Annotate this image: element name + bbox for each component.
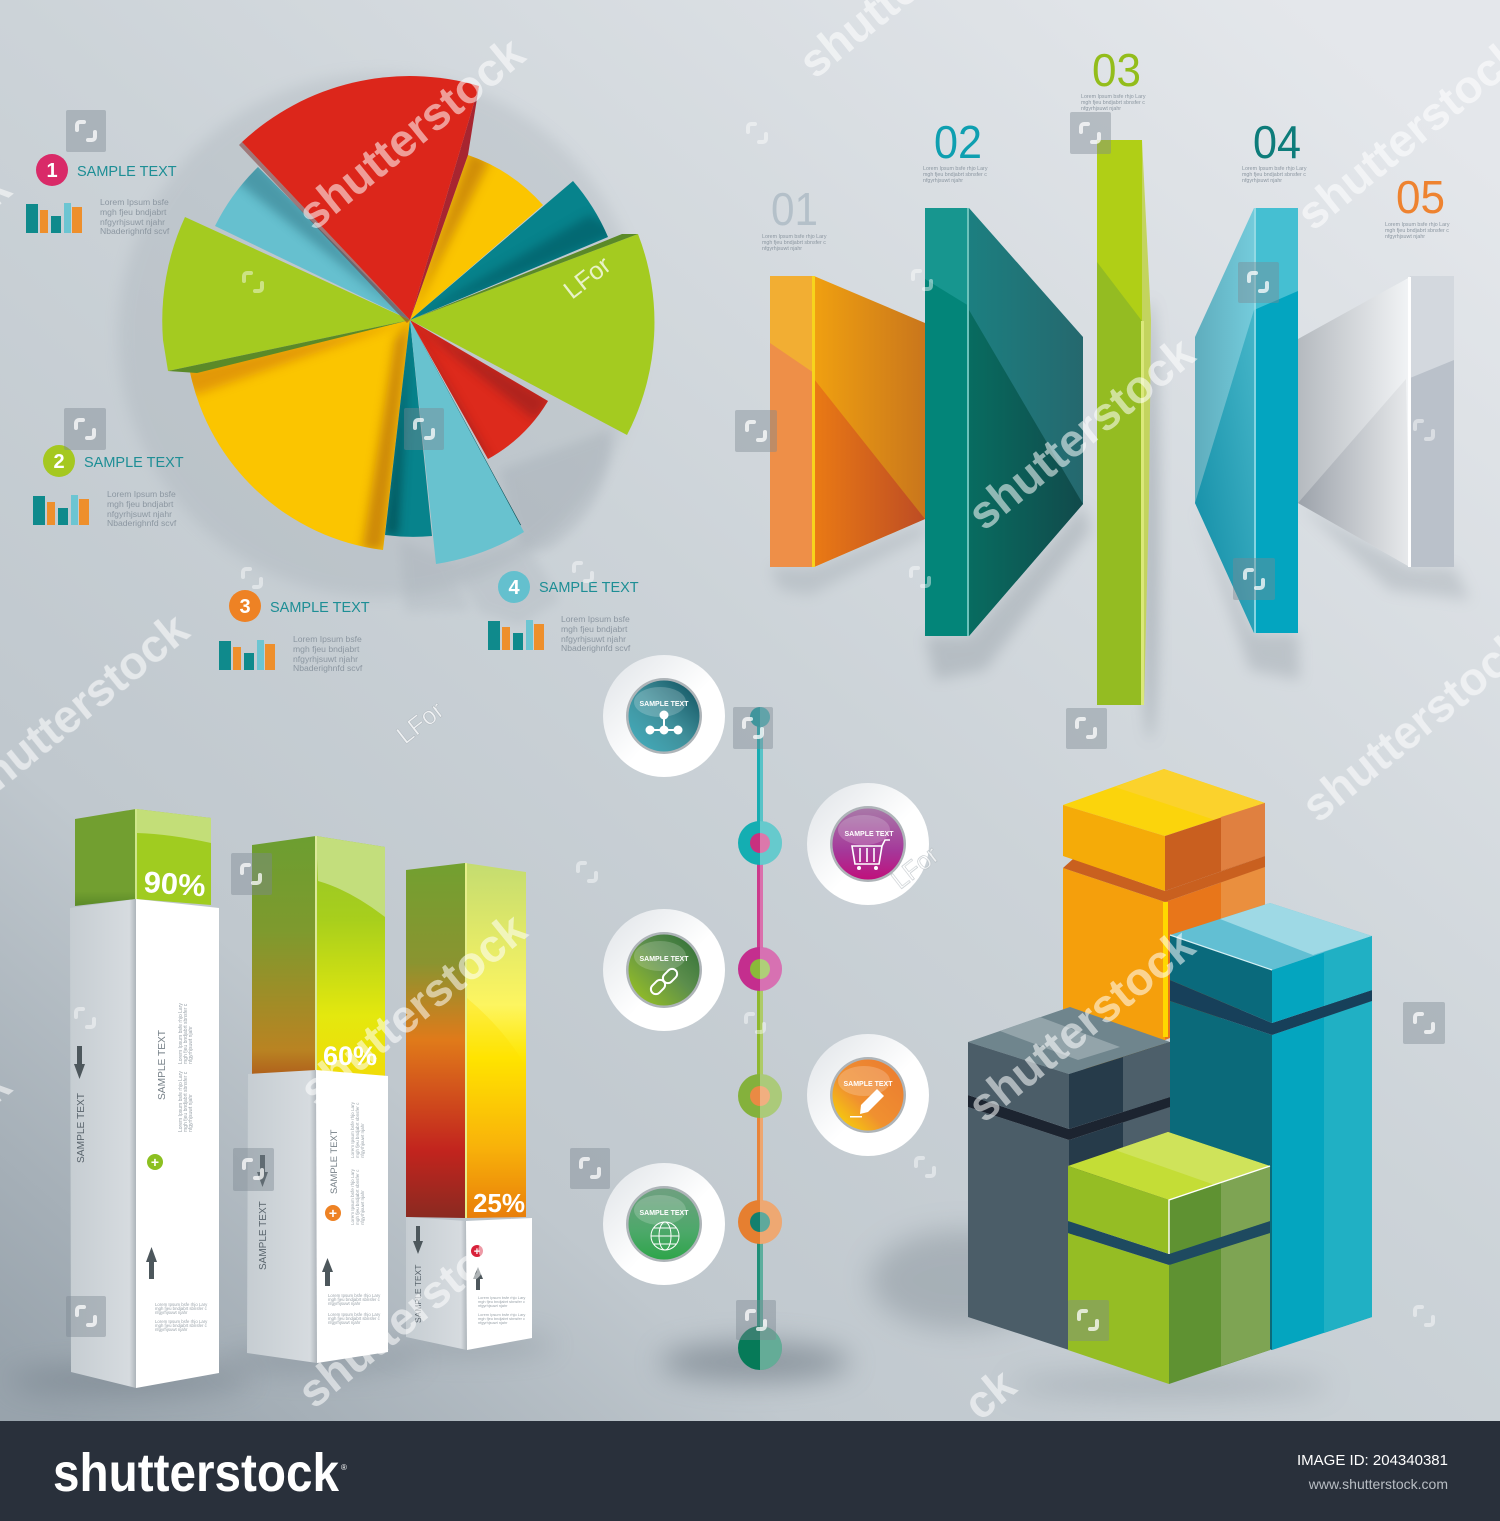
column 90%: nfgyrhjsuwt njahr	[155, 1327, 188, 1332]
grey block	[968, 1007, 1170, 1350]
watermark tiles	[64, 110, 1445, 1341]
column 60%: Lorem Ipsum bsfe rhjo Lary	[328, 1293, 381, 1298]
step 05 grey: nfgyrhjsuwt njahr	[1385, 234, 1425, 240]
legend 3: SAMPLE TEXT	[270, 600, 370, 616]
small LFor marks: LFor	[391, 696, 449, 750]
column 60%: SAMPLE TEXT	[328, 1129, 339, 1194]
small LFor marks: LFor	[886, 841, 944, 895]
step 04 blue: 04	[1253, 116, 1301, 168]
step 03 lime	[1081, 44, 1151, 705]
legend 2: Lorem Ipsum bsfe	[107, 489, 176, 499]
legend 1	[26, 154, 177, 236]
column 90%: Lorem Ipsum bsfe rhjo Lary	[155, 1302, 208, 1307]
node 4	[738, 1074, 782, 1118]
step 01 orange	[762, 183, 925, 567]
column 90%: Lorem Ipsum bsfe rhjo Lary	[178, 1003, 184, 1064]
column 90%: mgh fjeu bndjabrt sbnsfer c	[183, 1003, 189, 1064]
column 25%: 25%	[473, 1188, 525, 1218]
column 25%: Lorem Ipsum bsfe rhjo Lary	[478, 1295, 525, 1300]
small LFor marks	[391, 696, 944, 895]
footer registered mark: ®	[341, 1463, 347, 1472]
step 02 teal: Lorem Ipsum bsfe rhjo Lary	[923, 166, 988, 172]
funnel chart	[762, 44, 1470, 740]
timeline	[660, 707, 850, 1382]
column 90%: Lorem Ipsum bsfe rhjo Lary	[178, 1071, 184, 1132]
step 03 lime: Lorem Ipsum bsfe rhjo Lary	[1081, 94, 1146, 100]
column 25%: +	[474, 1246, 480, 1258]
legend 2: Nbaderighnfd scvf	[107, 518, 177, 528]
step 01 orange: Lorem Ipsum bsfe rhjo Lary	[762, 234, 827, 240]
column 25%: nfgyrhjsuwt njahr	[478, 1320, 508, 1325]
step 05 grey: mgh fjeu bndjabrt sbnsfer c	[1385, 228, 1449, 234]
footer image id: IMAGE ID: 204340381	[1297, 1452, 1448, 1469]
legend 1: 1	[46, 160, 58, 182]
watermark text: shutterstock	[288, 26, 534, 240]
step 02 teal: mgh fjeu bndjabrt sbnsfer c	[923, 172, 987, 178]
column 90%: nfgyrhjsuwt njahr	[188, 1094, 194, 1132]
node 1	[750, 707, 770, 727]
legend 4: Lorem Ipsum bsfe	[561, 614, 630, 624]
legend 4: SAMPLE TEXT	[539, 580, 639, 596]
percentage columns	[10, 809, 555, 1394]
column 60%: nfgyrhjsuwt njahr	[360, 1123, 365, 1158]
column 25%: nfgyrhjsuwt njahr	[478, 1303, 508, 1308]
step 04 blue: nfgyrhjsuwt njahr	[1242, 178, 1282, 184]
step 03 lime: 03	[1092, 44, 1141, 96]
pie chart	[118, 73, 654, 625]
column 90%: nfgyrhjsuwt njahr	[155, 1310, 188, 1315]
button: link	[603, 909, 725, 1031]
legend 4	[488, 571, 639, 653]
button: globe	[603, 1163, 725, 1285]
lime block	[1068, 1132, 1270, 1384]
legend 2: nfgyrhjsuwt njahr	[107, 509, 172, 519]
legend 2: SAMPLE TEXT	[84, 455, 184, 471]
button: globe: SAMPLE TEXT	[639, 1210, 689, 1217]
column 90%	[70, 809, 219, 1388]
column 90%: Lorem Ipsum bsfe rhjo Lary	[155, 1319, 208, 1324]
column 60%: nfgyrhjsuwt njahr	[360, 1190, 365, 1225]
column 60%: Lorem Ipsum bsfe rhjo Lary	[350, 1101, 355, 1158]
legend 3: nfgyrhjsuwt njahr	[293, 654, 358, 664]
column 60%: 60%	[323, 1041, 377, 1071]
legend 4: Nbaderighnfd scvf	[561, 643, 631, 653]
column 60%: mgh fjeu bndjabrt sbnsfer c	[328, 1297, 381, 1302]
button: network: SAMPLE TEXT	[639, 701, 689, 708]
legend 3: Nbaderighnfd scvf	[293, 663, 363, 673]
button: cart: SAMPLE TEXT	[844, 831, 894, 838]
column 25%: SAMPLE TEXT	[413, 1265, 423, 1323]
step 03 lime: mgh fjeu bndjabrt sbnsfer c	[1081, 100, 1145, 106]
node 5	[738, 1200, 782, 1244]
watermark text: shutterstock	[958, 326, 1204, 540]
column 90%: 90%	[143, 866, 207, 903]
legend 1: SAMPLE TEXT	[77, 164, 177, 180]
legend 1: Lorem Ipsum bsfe	[100, 197, 169, 207]
column 60%: mgh fjeu bndjabrt sbnsfer c	[355, 1102, 360, 1158]
button: pencil	[807, 1034, 929, 1156]
column 60%: Lorem Ipsum bsfe rhjo Lary	[350, 1168, 355, 1225]
footer url: www.shutterstock.com	[1308, 1476, 1448, 1492]
step 04 blue: Lorem Ipsum bsfe rhjo Lary	[1242, 166, 1307, 172]
legend 4: 4	[508, 577, 520, 599]
column 90%: nfgyrhjsuwt njahr	[188, 1026, 194, 1064]
legend 3: 3	[239, 596, 251, 618]
legend 4: nfgyrhjsuwt njahr	[561, 634, 626, 644]
column 60%: mgh fjeu bndjabrt sbnsfer c	[328, 1316, 381, 1321]
footer logo: shutterstock	[53, 1443, 340, 1503]
legend 1: mgh fjeu bndjabrt	[100, 207, 167, 217]
step 01 orange: 01	[771, 183, 818, 235]
blue block	[1170, 903, 1372, 1350]
column 60%: +	[329, 1205, 337, 1221]
button: network	[603, 655, 725, 777]
footer bar	[0, 1421, 1500, 1521]
column 90%: mgh fjeu bndjabrt sbnsfer c	[183, 1071, 189, 1132]
step 04 blue	[1195, 116, 1307, 633]
step 01 orange: nfgyrhjsuwt njahr	[762, 246, 802, 252]
legend 1: nfgyrhjsuwt njahr	[100, 217, 165, 227]
column 60%	[247, 836, 388, 1363]
legend 2: 2	[53, 451, 65, 473]
column 60%: nfgyrhjsuwt njahr	[328, 1320, 361, 1325]
column 90%: mgh fjeu bndjabrt sbnsfer c	[155, 1323, 208, 1328]
column 90%: +	[151, 1154, 159, 1170]
orange block	[1063, 769, 1265, 1100]
button: pencil: SAMPLE TEXT	[843, 1081, 893, 1088]
column 90%: SAMPLE TEXT	[157, 1030, 168, 1100]
column 60%: nfgyrhjsuwt njahr	[328, 1301, 361, 1306]
column 25%: Lorem Ipsum bsfe rhjo Lary	[478, 1312, 525, 1317]
step 03 lime: nfgyrhjsuwt njahr	[1081, 106, 1121, 112]
step 04 blue: mgh fjeu bndjabrt sbnsfer c	[1242, 172, 1306, 178]
watermark text: shutterstock	[290, 902, 536, 1116]
button: cart	[807, 783, 929, 905]
column 60%: mgh fjeu bndjabrt sbnsfer c	[355, 1169, 360, 1225]
isometric block chart	[870, 769, 1372, 1397]
legend 3: mgh fjeu bndjabrt	[293, 644, 360, 654]
legend 3: Lorem Ipsum bsfe	[293, 634, 362, 644]
legend 1: Nbaderighnfd scvf	[100, 226, 170, 236]
step 05 grey: Lorem Ipsum bsfe rhjo Lary	[1385, 222, 1450, 228]
node 6	[738, 1326, 782, 1370]
watermark text: shutterstock	[958, 918, 1204, 1132]
column 90%: SAMPLE TEXT	[76, 1093, 87, 1163]
step 05 grey: 05	[1396, 171, 1445, 223]
step 02 teal: 02	[934, 116, 982, 168]
legend 3	[219, 590, 370, 673]
column 25%: mgh fjeu bndjabrt sbnsfer c	[478, 1316, 525, 1321]
step 02 teal: nfgyrhjsuwt njahr	[923, 178, 963, 184]
step 01 orange: mgh fjeu bndjabrt sbnsfer c	[762, 240, 826, 246]
legend 2	[33, 445, 184, 528]
column 60%: Lorem Ipsum bsfe rhjo Lary	[328, 1312, 381, 1317]
column 60%: SAMPLE TEXT	[258, 1201, 269, 1270]
step 05 grey	[1298, 171, 1454, 567]
pie slice label: LFor	[558, 251, 616, 305]
node 3	[738, 947, 782, 991]
watermark text: shutterstock	[288, 1204, 534, 1418]
button: link: SAMPLE TEXT	[639, 956, 689, 963]
legend 4: mgh fjeu bndjabrt	[561, 624, 628, 634]
column 25%: mgh fjeu bndjabrt sbnsfer c	[478, 1299, 525, 1304]
column 25%	[406, 863, 532, 1350]
node 2	[738, 821, 782, 865]
step 02 teal	[923, 116, 1083, 636]
legend 2: mgh fjeu bndjabrt	[107, 499, 174, 509]
column 90%: mgh fjeu bndjabrt sbnsfer c	[155, 1306, 208, 1311]
watermark text: ck	[954, 1358, 1025, 1430]
